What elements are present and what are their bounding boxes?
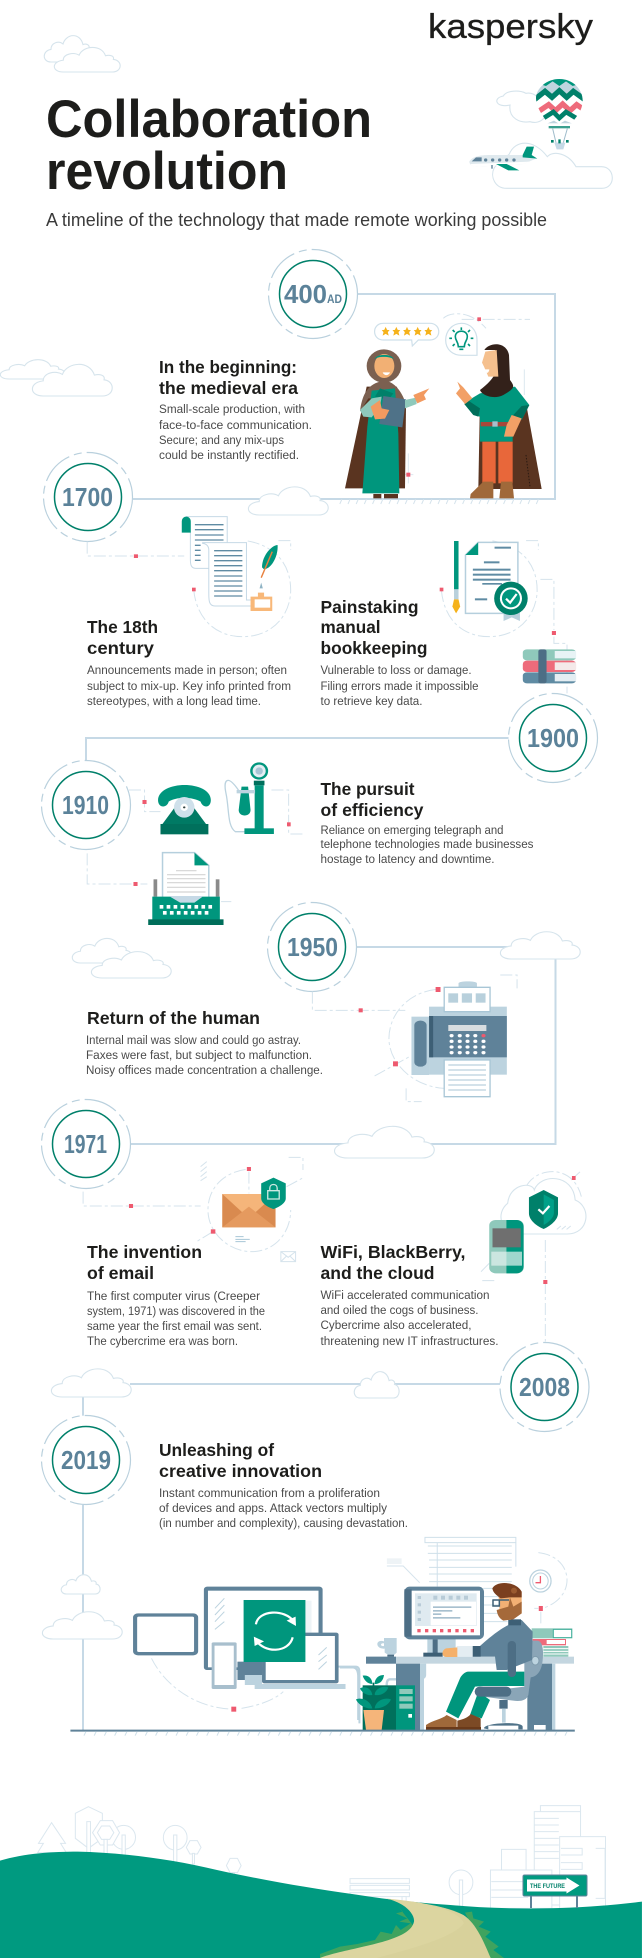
text block: the pursuit of efficiency: hostage to latency and downtime. xyxy=(320,852,494,866)
text block: return of the human xyxy=(86,1008,323,1077)
desktop monitor xyxy=(204,1587,323,1685)
text block: the invention of email xyxy=(87,1242,265,1348)
wall clock xyxy=(530,1553,567,1623)
icon: rotary telephone xyxy=(129,785,211,834)
year marker: 1700 xyxy=(44,452,132,542)
text block: the 18th century: subject to mix-up. Key info printed from xyxy=(87,679,291,693)
icon: candlestick telephone xyxy=(225,762,305,834)
green hills xyxy=(0,1852,642,1958)
year marker: 2008 xyxy=(500,1342,589,1432)
ground hatch under medieval scene xyxy=(340,499,538,504)
text block: return of the human: Return of the human xyxy=(87,1008,260,1028)
logo: kaspersky: kaspersky xyxy=(428,8,593,46)
illustration: cloud, shield and BlackBerry xyxy=(481,1171,586,1342)
text block: the pursuit of efficiency xyxy=(320,779,534,866)
text block: return of the human: Noisy offices made concentration a challenge. xyxy=(86,1063,323,1077)
text block: painstaking manual bookkeeping: Painstaking xyxy=(320,597,418,617)
year marker: 1950: 1950 xyxy=(287,934,338,962)
illustration: medieval figures xyxy=(345,314,542,498)
sync tile xyxy=(244,1600,305,1662)
background clouds xyxy=(0,36,580,1639)
text block: the pursuit of efficiency: The pursuit xyxy=(320,779,415,799)
text block: painstaking manual bookkeeping: bookkeeping xyxy=(320,638,428,658)
year marker: 400AD: AD xyxy=(327,292,342,306)
text block: painstaking manual bookkeeping: Filing errors made it impossible xyxy=(320,679,479,693)
office chair xyxy=(483,1641,543,1729)
illustration: worker at desk xyxy=(340,1583,574,1730)
text block: in the beginning: Small-scale production, with xyxy=(159,402,305,416)
year marker: 1910 xyxy=(42,760,130,850)
year marker: 2019: 2019 xyxy=(61,1447,111,1475)
laptop xyxy=(255,1633,346,1689)
illustration: fax machine xyxy=(312,975,517,1102)
text block: painstaking manual bookkeeping: Vulnerable to loss or damage. xyxy=(320,663,472,677)
text block: the pursuit of efficiency: Reliance on emerging telegraph and xyxy=(320,823,504,837)
text block: in the beginning: In the beginning: xyxy=(159,357,297,377)
text block: the invention of email: The cybercrime era was born. xyxy=(87,1334,238,1348)
ground line with hatch xyxy=(70,1731,575,1736)
text block: the 18th century: The 18th xyxy=(87,617,158,637)
icon: typewriter xyxy=(87,853,231,925)
text block: the 18th century: Announcements made in person; often xyxy=(87,663,287,677)
icon: airplane xyxy=(469,147,537,170)
text block: the invention of email: of email xyxy=(87,1263,154,1283)
text block: the 18th century: stereotypes, with a long lead time. xyxy=(87,694,261,708)
text block: unleashing of creative innovation: Unleashing of xyxy=(159,1440,274,1460)
tablet xyxy=(133,1613,198,1655)
year marker: 400AD: 400 xyxy=(284,281,327,309)
text block: wifi, blackberry, and the cloud: WiFi, BlackBerry, xyxy=(320,1242,466,1262)
smartphone xyxy=(212,1642,237,1689)
text block: wifi, blackberry, and the cloud: and oiled the cogs of business. xyxy=(320,1303,478,1317)
text block: the invention of email: same year the first email was sent. xyxy=(87,1319,262,1333)
landscape: outlined trees, city, bench and green hills xyxy=(0,1806,642,1958)
year marker: 1950 xyxy=(268,902,356,992)
text block: unleashing of creative innovation: of devices and apps. Attack vectors multiply xyxy=(159,1501,388,1515)
year marker: 1900 xyxy=(508,694,598,782)
year marker: 2019 xyxy=(42,1416,130,1504)
worker xyxy=(426,1583,533,1730)
text block: unleashing of creative innovation: creative innovation xyxy=(159,1461,322,1481)
year marker: 1971: 1971 xyxy=(64,1131,107,1159)
computer tower and plant xyxy=(356,1675,415,1730)
year marker: 1900: 1900 xyxy=(527,725,579,753)
winding path with grass edges xyxy=(320,1898,504,1958)
bench xyxy=(350,1879,409,1905)
text block: wifi, blackberry, and the cloud: Cybercrime also accelerated, xyxy=(320,1318,472,1332)
window blinds xyxy=(425,1537,516,1622)
outlined trees xyxy=(38,1807,473,1908)
icon: hot air balloon xyxy=(534,78,585,149)
text block: the 18th century xyxy=(87,617,291,708)
text block: the 18th century: century xyxy=(87,638,154,658)
man figure xyxy=(456,344,542,498)
illustration: email with padlock shield xyxy=(83,1157,303,1262)
text block: the invention of email: The invention xyxy=(87,1242,202,1262)
text block: painstaking manual bookkeeping xyxy=(320,597,479,708)
coffee mug xyxy=(377,1638,397,1655)
cables xyxy=(340,1664,425,1720)
icon: light bulb xyxy=(446,323,477,355)
text block: return of the human: Faxes were fast, but subject to malfunction. xyxy=(86,1048,312,1062)
text block: return of the human: Internal mail was slow and could go astray. xyxy=(86,1033,301,1047)
stack of books on desk xyxy=(532,1628,572,1657)
text block: the invention of email: The first computer virus (Creeper xyxy=(87,1289,260,1303)
text block: unleashing of creative innovation: Instant communication from a proliferation xyxy=(159,1486,380,1500)
text block: in the beginning: face-to-face communication. xyxy=(159,418,312,432)
title: revolution xyxy=(46,142,288,201)
text block: in the beginning: the medieval era xyxy=(159,378,298,398)
text block: wifi, blackberry, and the cloud: and the cloud xyxy=(320,1263,434,1283)
illustration: scroll, quill and ink xyxy=(87,517,291,637)
text block: wifi, blackberry, and the cloud: WiFi accelerated communication xyxy=(320,1288,490,1302)
speech bubble with stars xyxy=(375,323,439,346)
monitor on desk xyxy=(404,1587,484,1657)
text block: the pursuit of efficiency: of efficiency xyxy=(320,800,424,820)
timeline connector lines xyxy=(83,294,556,1731)
text block: in the beginning xyxy=(159,357,312,462)
icon: stack of books xyxy=(523,649,576,683)
window blinds and wall clock xyxy=(387,1537,567,1623)
year marker: 400AD xyxy=(268,250,358,338)
illustration: devices syncing xyxy=(133,1587,359,1723)
signpost: the future: THE FUTURE xyxy=(530,1883,566,1890)
clouds behind balloon and plane xyxy=(493,91,612,188)
title xyxy=(46,90,372,201)
text block: the pursuit of efficiency: telephone technologies made businesses xyxy=(320,837,534,851)
text block: wifi, blackberry, and the cloud: threatening new IT infrastructures. xyxy=(320,1334,498,1348)
year marker: 2008: 2008 xyxy=(519,1374,570,1402)
title: Collaboration xyxy=(46,90,372,149)
signpost: the future xyxy=(523,1875,587,1908)
illustration: document, pen and seal xyxy=(440,541,567,693)
subtitle: A timeline of the technology that made remote working possible xyxy=(46,210,547,230)
outlined buildings xyxy=(490,1806,606,1908)
year marker: 1700: 1700 xyxy=(62,484,113,512)
text block: unleashing of creative innovation: (in number and complexity), causing devastation. xyxy=(159,1516,408,1530)
text block: unleashing of creative innovation xyxy=(159,1440,408,1530)
woman figure xyxy=(345,349,429,498)
year marker: 1910: 1910 xyxy=(62,792,109,820)
year marker: 1971 xyxy=(42,1100,130,1188)
text block: painstaking manual bookkeeping: to retrieve key data. xyxy=(320,694,422,708)
text block: painstaking manual bookkeeping: manual xyxy=(320,617,380,637)
text block: wifi, blackberry, and the cloud xyxy=(320,1242,498,1348)
desk xyxy=(366,1657,574,1730)
text block: in the beginning: Secure; and any mix-ups xyxy=(159,433,284,447)
text block: in the beginning: could be instantly rectified. xyxy=(159,448,299,462)
text block: the invention of email: system, 1971) was discovered in the xyxy=(87,1304,265,1318)
